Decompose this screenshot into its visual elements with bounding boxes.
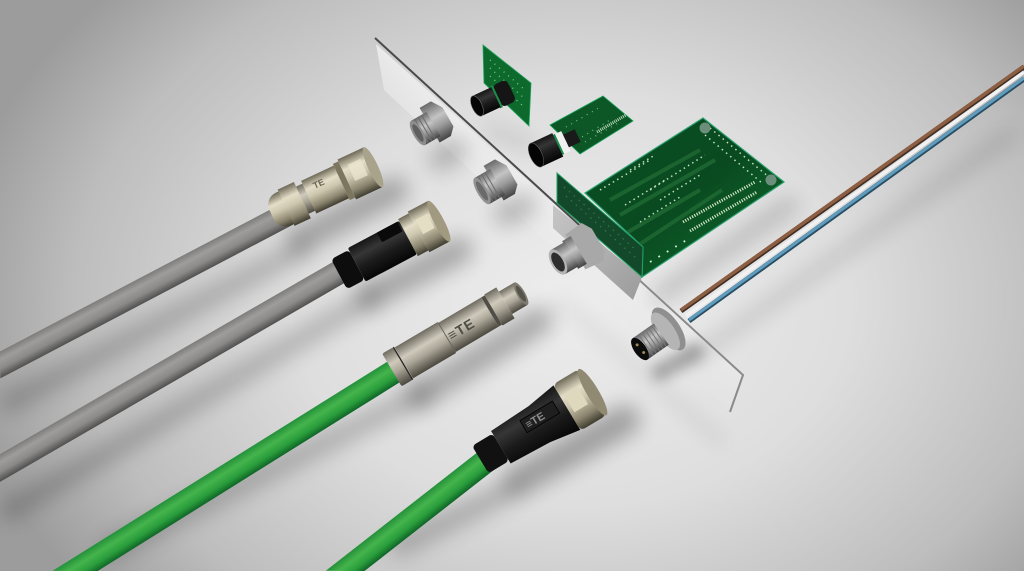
drop shadows (10, 130, 1010, 550)
M12 panel connector (621, 302, 692, 373)
main board: horizontal circuit board (585, 118, 784, 277)
connector 2: black with gray cable (328, 199, 454, 295)
gray cable 1 (0, 203, 293, 378)
panel: plate edge (375, 38, 743, 412)
logo: ≡TE (445, 315, 478, 343)
small board 2 (525, 96, 633, 169)
panel: glass plate face (376, 44, 743, 412)
wires: brown, white and blue (681, 66, 1024, 321)
bracket connector (541, 220, 609, 285)
green cable 2 (326, 451, 494, 571)
camera barrel 2 (525, 124, 583, 169)
connector 3: metal with green cable (382, 275, 534, 386)
logo: TE (311, 177, 326, 191)
small board 1 (467, 45, 531, 126)
green cable 1 (53, 357, 408, 571)
camera barrel 1 (467, 79, 517, 119)
main board: bracket (553, 205, 642, 300)
gray cable 2 (0, 258, 352, 482)
connector 4: black with green cable (466, 366, 612, 483)
logo: ≡TE (523, 410, 547, 431)
main board: vertical circuit board (557, 173, 643, 277)
nut 1 (403, 98, 457, 152)
logo (520, 401, 560, 433)
nut 2 (467, 156, 521, 210)
connector 1: metal with gray cable (262, 145, 387, 234)
